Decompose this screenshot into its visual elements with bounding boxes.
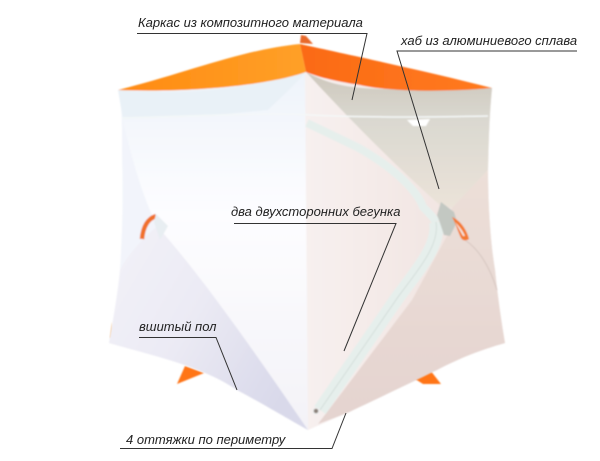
callout: composite frame	[137, 15, 367, 100]
panel: lower right floor section	[318, 170, 505, 424]
callout: sewn-in floor: вшитый пол	[139, 319, 217, 334]
icon: left hub with orange loop	[142, 214, 168, 240]
zipper	[307, 123, 436, 410]
seam: lower right arc	[465, 240, 497, 290]
highlight on roof panel	[407, 119, 430, 126]
callout: composite frame: Каркас из композитного материала	[138, 15, 363, 30]
panel: tent right face	[305, 72, 505, 430]
callout: four guy lines: 4 оттяжки по периметру	[126, 432, 287, 447]
icon: bottom grommet	[313, 408, 319, 414]
roof: left orange panel	[118, 44, 306, 91]
panel: left blue edge section	[120, 118, 157, 270]
panel: tent left face	[109, 70, 308, 430]
callout: sewn-in floor	[139, 319, 237, 390]
callout: aluminium hub: хаб из алюминиевого сплава	[400, 33, 577, 48]
icon: right hub with orange loop	[437, 202, 469, 240]
roof: right orange panel	[300, 44, 492, 91]
callout: aluminium hub	[397, 33, 577, 189]
callout: two double-sided sliders: два двухсторонних бегунка	[231, 204, 400, 219]
panel: upper left light section	[118, 72, 306, 119]
callout: four guy lines	[120, 413, 346, 448]
callout: two double-sided sliders	[231, 204, 400, 351]
panel: upper right composite frame section	[306, 72, 492, 208]
tent body	[109, 44, 505, 430]
panel: lower left floor section	[109, 226, 308, 430]
icon: orange guy lines	[110, 35, 441, 384]
seam: horizontal band	[122, 114, 488, 118]
